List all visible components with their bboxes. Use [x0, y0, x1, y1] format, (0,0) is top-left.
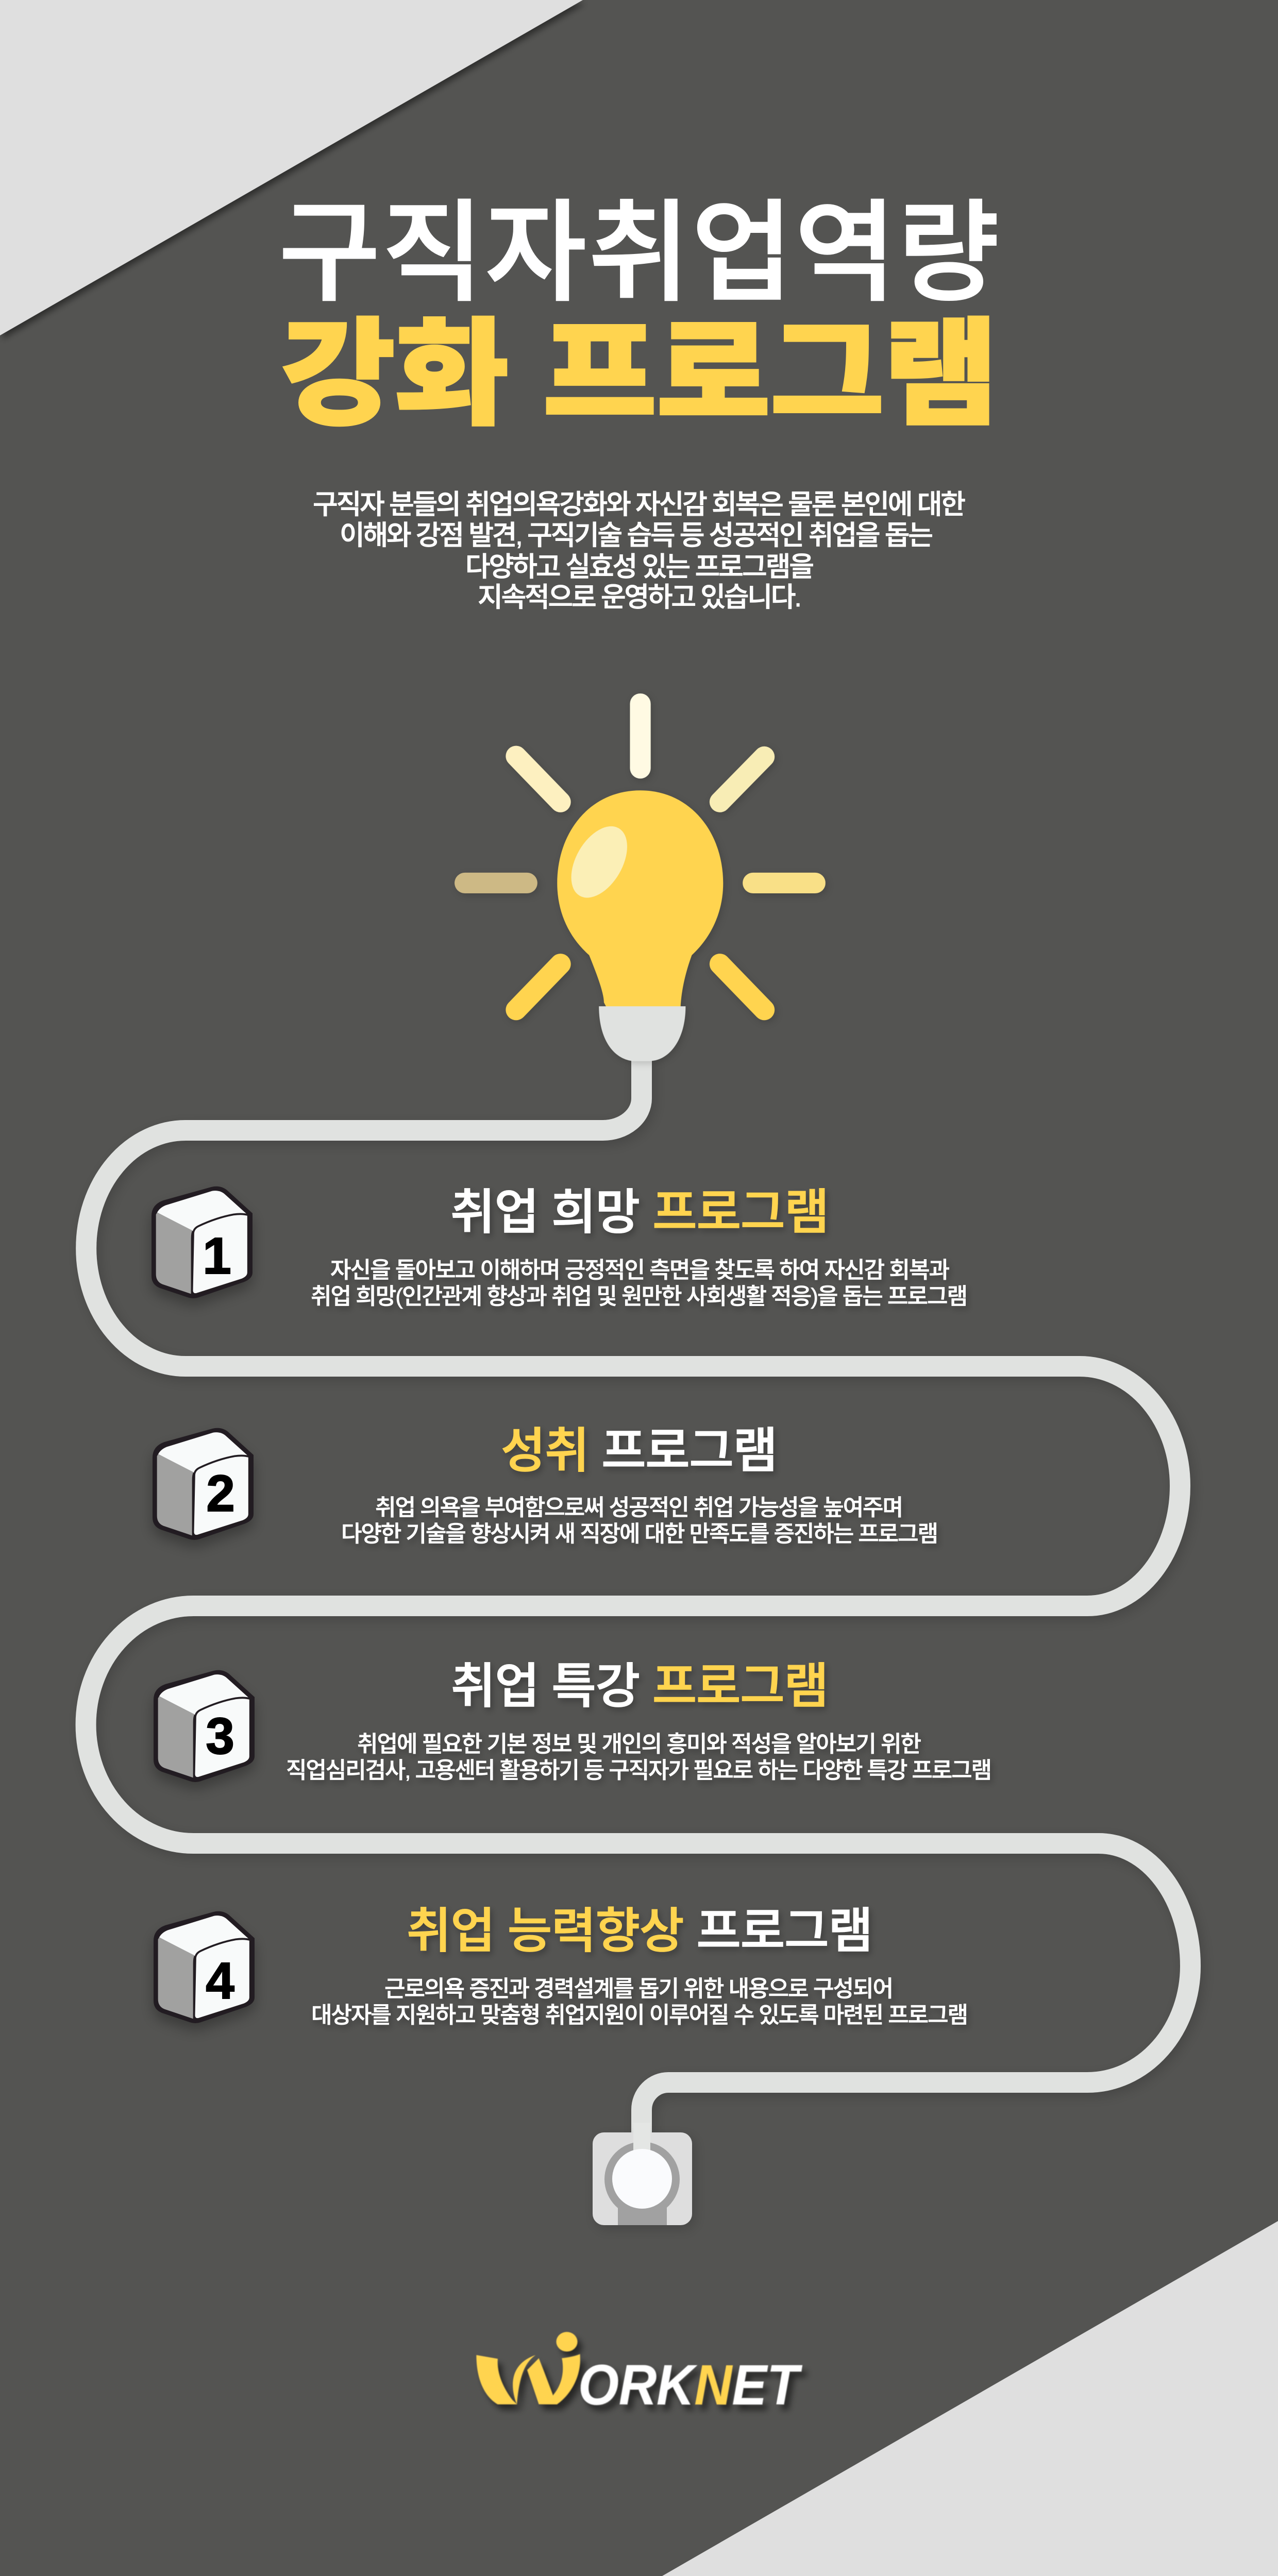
icon: cube 1: 1 [203, 1227, 231, 1285]
decorative corner: top left [0, 0, 583, 335]
intro text: 이해와 강점 발견, 구직기술 습득 등 성공적인 취업을 돕는 [340, 520, 933, 551]
icon: cube 2: 2 [206, 1465, 235, 1522]
title [279, 192, 999, 439]
intro text: 다양하고 실효성 있는 프로그램을 [465, 552, 814, 582]
cable end [633, 2123, 650, 2154]
description 1 [311, 1258, 968, 1309]
socket slot [618, 2200, 667, 2225]
description 4: 근로의욕 증진과 경력설계를 돕기 위한 내용으로 구성되어 [384, 1976, 894, 2002]
heading 3: 취업 특강 프로그램 [451, 1659, 829, 1713]
icon: cube 3 [154, 1670, 255, 1782]
cable [86, 1056, 1190, 2149]
highlight [560, 817, 638, 907]
socket plate [593, 2132, 692, 2225]
description 3: 직업심리검사, 고용센터 활용하기 등 구직자가 필요로 하는 다양한 특강 프로그램 [286, 1758, 992, 1783]
logo: WORKNET [476, 2332, 802, 2417]
intro text: 구직자 분들의 취업의욕강화와 자신감 회복은 물론 본인에 대한 [313, 489, 966, 520]
intro text [313, 489, 966, 613]
description 2 [341, 1495, 938, 1547]
description 3: 취업에 필요한 기본 정보 및 개인의 흥미와 적성을 알아보기 위한 [357, 1732, 921, 1757]
program 3 [154, 1659, 992, 1783]
icon: cube 4: 4 [206, 1952, 234, 2010]
heading 2: 성취 프로그램 [501, 1423, 778, 1478]
intro text: 지속적으로 운영하고 있습니다. [478, 582, 802, 613]
bulb base [599, 1006, 685, 1061]
heading 1: 취업 희망 프로그램 [450, 1185, 829, 1239]
description 1: 취업 희망(인간관계 향상과 취업 및 원만한 사회생활 적응)을 돕는 프로그램 [311, 1284, 968, 1309]
description 4 [311, 1976, 968, 2028]
decorative corner: bottom right [662, 2221, 1278, 2576]
icon: cube 3: 3 [206, 1707, 234, 1765]
program 1 [152, 1185, 968, 1309]
program 4 [154, 1904, 968, 2028]
logo text: ORKNET [578, 2353, 802, 2417]
logo mark [476, 2332, 580, 2404]
bulb glass [557, 790, 723, 1007]
program 2 [153, 1423, 938, 1547]
rays [465, 704, 815, 1010]
icon: cube 1 [152, 1187, 253, 1298]
description 2: 다양한 기술을 향상시켜 새 직장에 대한 만족도를 증진하는 프로그램 [341, 1521, 938, 1547]
description 3 [286, 1732, 992, 1783]
description 4: 대상자를 지원하고 맞춤형 취업지원이 이루어질 수 있도록 마련된 프로그램 [311, 2003, 968, 2028]
description 2: 취업 의욕을 부여함으로써 성공적인 취업 가능성을 높여주며 [375, 1495, 903, 1520]
icon: power socket [593, 2123, 692, 2225]
icon: cube 4 [154, 1911, 255, 2023]
icon: light bulb [465, 704, 815, 1061]
socket plug [612, 2149, 672, 2209]
socket ring [604, 2142, 680, 2217]
icon: cube 2 [153, 1428, 254, 1540]
description 1: 자신을 돌아보고 이해하며 긍정적인 측면을 찾도록 하여 자신감 회복과 [330, 1258, 950, 1283]
heading 4: 취업 능력향상 프로그램 [407, 1904, 873, 1958]
title line 1: 구직자취업역량 [279, 192, 999, 315]
title line 2: 강화 프로그램 [281, 310, 998, 439]
